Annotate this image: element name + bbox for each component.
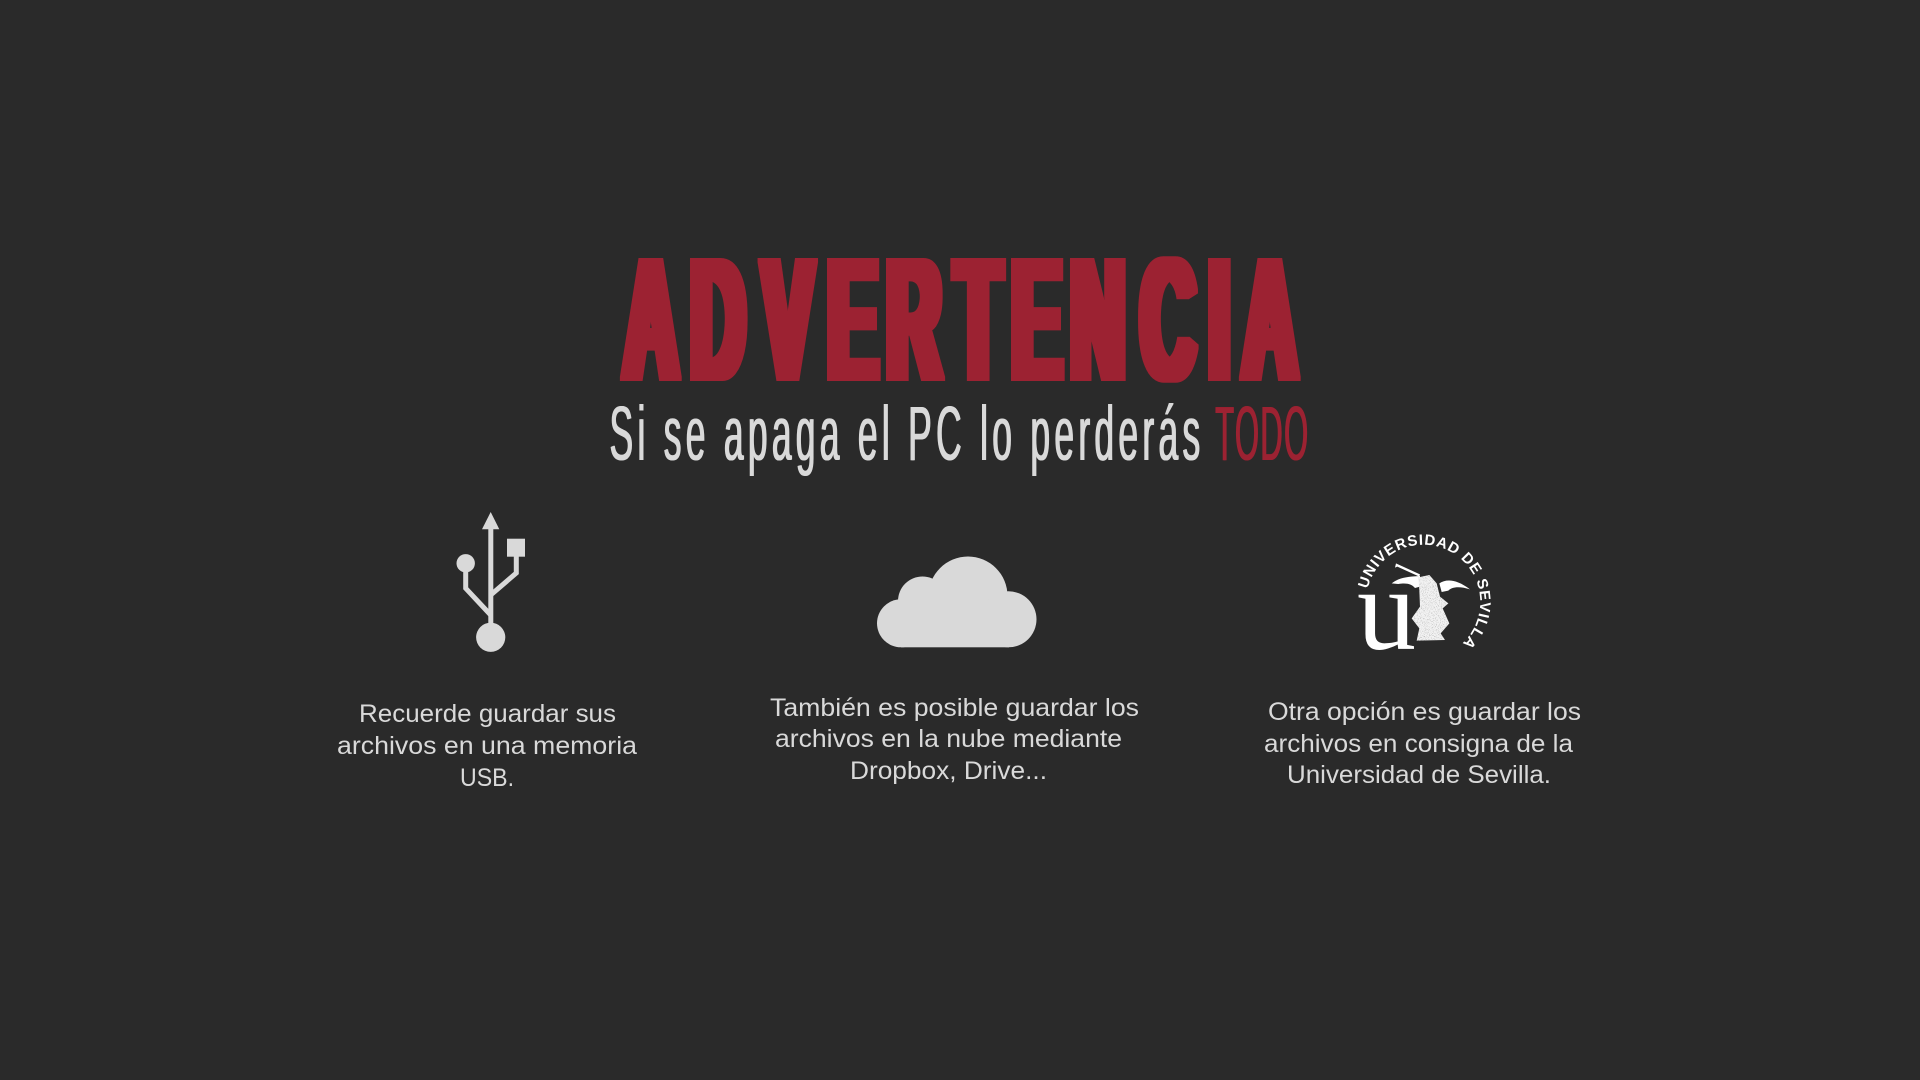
- icon: Universidad de Sevilla logo: u: [1357, 544, 1416, 675]
- text: university: Otra opción es guardar los: [1268, 698, 1581, 726]
- panel: university: [1264, 534, 1581, 789]
- panel: cloud: [770, 556, 1139, 785]
- text: university: [1264, 698, 1581, 789]
- title: ADVERTENCIA: [624, 223, 1297, 417]
- text: USB: [337, 700, 637, 792]
- text: university: archivos en consigna de la: [1264, 730, 1573, 758]
- text: USB: archivos en una memoria: [337, 732, 637, 760]
- subtitle: TODO: [1215, 392, 1308, 477]
- text: university: Universidad de Sevilla.: [1287, 761, 1551, 789]
- text: USB: Recuerde guardar sus: [359, 700, 616, 728]
- text: cloud: También es posible guardar los: [770, 694, 1139, 722]
- icon: cloud: [877, 556, 1036, 647]
- text: USB: USB.: [460, 764, 514, 792]
- text: cloud: [770, 694, 1139, 785]
- subtitle: Si se apaga el PC lo perderás: [609, 391, 1200, 477]
- icon: USB: [456, 512, 525, 652]
- text: cloud: Dropbox, Drive...: [850, 757, 1047, 785]
- text: cloud: archivos en la nube mediante: [775, 725, 1122, 753]
- panel: USB: [337, 512, 637, 792]
- icon: Universidad de Sevilla logo: UNIVERSIDAD DE SEVILLA: [1358, 534, 1491, 648]
